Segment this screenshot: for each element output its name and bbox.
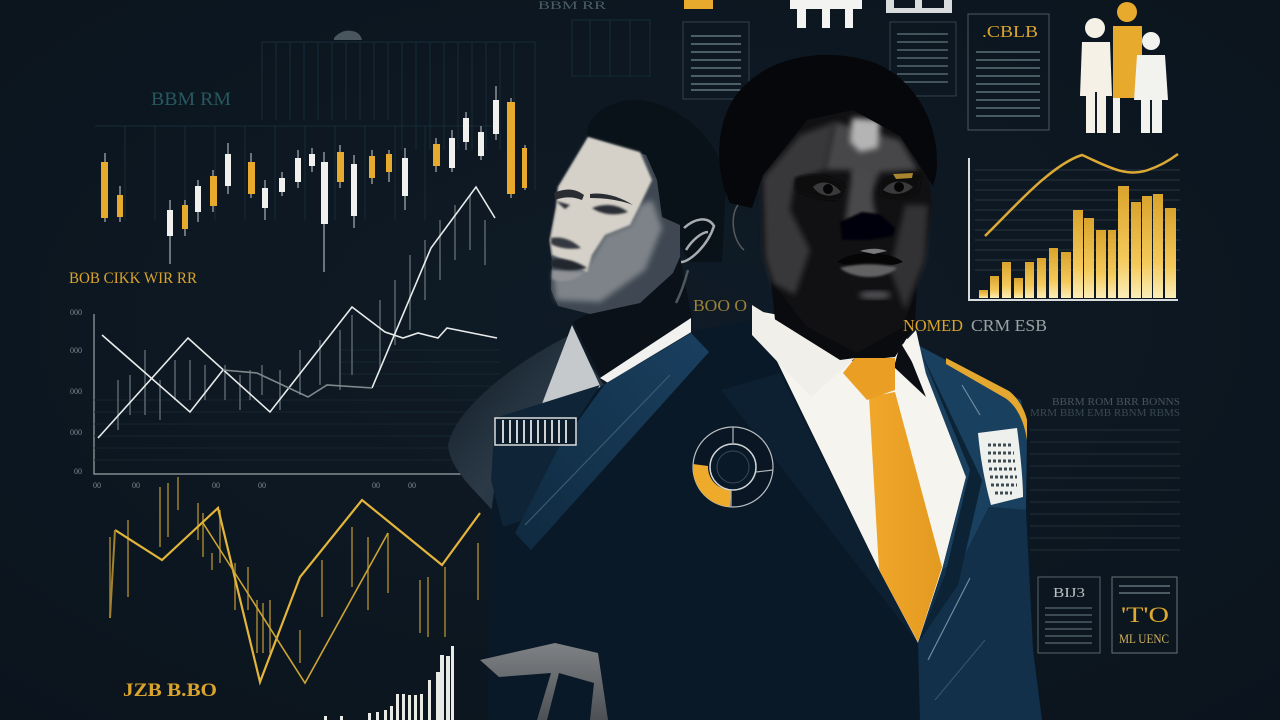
axis labels: 00	[258, 481, 266, 490]
axis labels: 000	[70, 387, 82, 396]
left figure lips	[551, 259, 587, 270]
hair cap	[719, 55, 937, 208]
axis labels: 000	[70, 346, 82, 355]
tie knot	[843, 358, 895, 400]
brows and eye sockets	[795, 172, 922, 200]
axis labels: 00	[93, 481, 101, 490]
nose bridge	[845, 172, 880, 222]
bottom left label: JZB B.BO	[123, 680, 217, 701]
gold shoulder trim	[946, 358, 1027, 440]
bars	[979, 186, 1176, 298]
chart rules	[975, 170, 1180, 270]
axis labels: 000	[70, 308, 82, 317]
left figure cheek plane	[553, 200, 662, 302]
right text block	[1030, 397, 1180, 550]
donut badge	[693, 427, 773, 507]
left figure brow	[554, 189, 633, 205]
collar right	[902, 330, 930, 392]
axis labels: 00	[132, 481, 140, 490]
left figure ear	[676, 219, 714, 303]
right cheek plane	[890, 205, 928, 310]
left lapel	[721, 373, 918, 643]
left figure hair	[587, 100, 726, 262]
bottom mini bar chart	[324, 646, 454, 720]
shirt	[752, 310, 966, 643]
right suit seams	[928, 385, 985, 700]
right suit lower	[918, 507, 1042, 720]
white series one	[98, 307, 497, 438]
candlestick chart	[101, 86, 527, 272]
right text block: BBRM ROM BRR BONNS	[1052, 397, 1180, 408]
chin highlight	[859, 291, 891, 299]
collar right shadow	[894, 337, 926, 397]
axis labels	[70, 308, 416, 490]
bottom right data cards: BIJ3	[1053, 586, 1085, 601]
tag on chest	[495, 418, 576, 445]
left figure shirt collar	[537, 325, 602, 417]
icon: small gadget	[886, 0, 952, 13]
axis labels: 00	[408, 481, 416, 490]
grey connector series	[223, 370, 372, 397]
collar left	[752, 305, 855, 397]
person: left figure	[448, 100, 726, 510]
left figure lit plane	[550, 137, 652, 272]
background grid chart panels	[95, 20, 650, 220]
icon: people group	[1080, 2, 1168, 133]
tie blade	[869, 392, 942, 642]
document 2	[890, 22, 956, 96]
line chart	[70, 187, 500, 490]
gold trend line	[985, 154, 1178, 236]
ear outline	[733, 205, 744, 250]
left figure lapel	[515, 333, 709, 550]
bottom right data cards: ML UENC	[1119, 631, 1169, 646]
axis labels: 00	[372, 481, 380, 490]
axis labels: 000	[70, 428, 82, 437]
axes	[94, 314, 486, 474]
left figure shoulder	[448, 335, 604, 510]
eyes	[813, 182, 913, 196]
document 1	[683, 22, 749, 99]
small label beside figures: BOO O	[693, 296, 747, 315]
document 3	[968, 14, 1049, 130]
right label: CRM ESB	[971, 316, 1047, 335]
right label	[903, 316, 1047, 335]
axis labels: 00	[74, 467, 82, 476]
right lapel dark stripe	[918, 350, 982, 643]
bottom right data cards: 'T'O	[1121, 602, 1169, 627]
lips	[837, 253, 903, 266]
white series two	[102, 187, 495, 412]
gold zigzag chart	[110, 477, 480, 683]
axes	[969, 158, 1178, 300]
left figure eye	[556, 201, 628, 214]
document heading: .CBLB	[982, 22, 1038, 41]
forehead plane	[825, 122, 918, 200]
bottom right data cards	[1038, 577, 1177, 653]
left figure neck	[573, 257, 692, 382]
left figure nose shadow	[551, 237, 581, 249]
left figure chest	[491, 385, 600, 527]
axis labels: 00	[212, 481, 220, 490]
left figure face	[549, 137, 680, 314]
top documents	[538, 0, 1049, 130]
forehead highlight	[850, 118, 880, 152]
chart label: BOB CIKK WIR RR	[69, 270, 197, 287]
noise series	[118, 195, 485, 430]
right text block: MRM BBM EMB RBNM RBMS	[1030, 408, 1180, 419]
cloud shape marker	[334, 31, 362, 40]
right label: NOMED	[903, 316, 963, 335]
name badge	[978, 428, 1023, 505]
right lapel	[914, 343, 1027, 570]
grid lines	[94, 350, 500, 460]
small heading top left chart: BBM RM	[151, 89, 231, 110]
neck	[770, 260, 918, 362]
lapel seam	[525, 375, 670, 525]
gold bar chart panel	[969, 154, 1180, 300]
suit body	[487, 320, 1042, 720]
icon: white building	[790, 0, 862, 28]
gold eye glint	[893, 173, 913, 179]
left cheek plane	[763, 122, 835, 295]
nose shadow	[840, 212, 895, 240]
face	[760, 105, 932, 353]
person: right figure	[487, 55, 1042, 720]
hand silhouette bottom	[480, 643, 608, 720]
